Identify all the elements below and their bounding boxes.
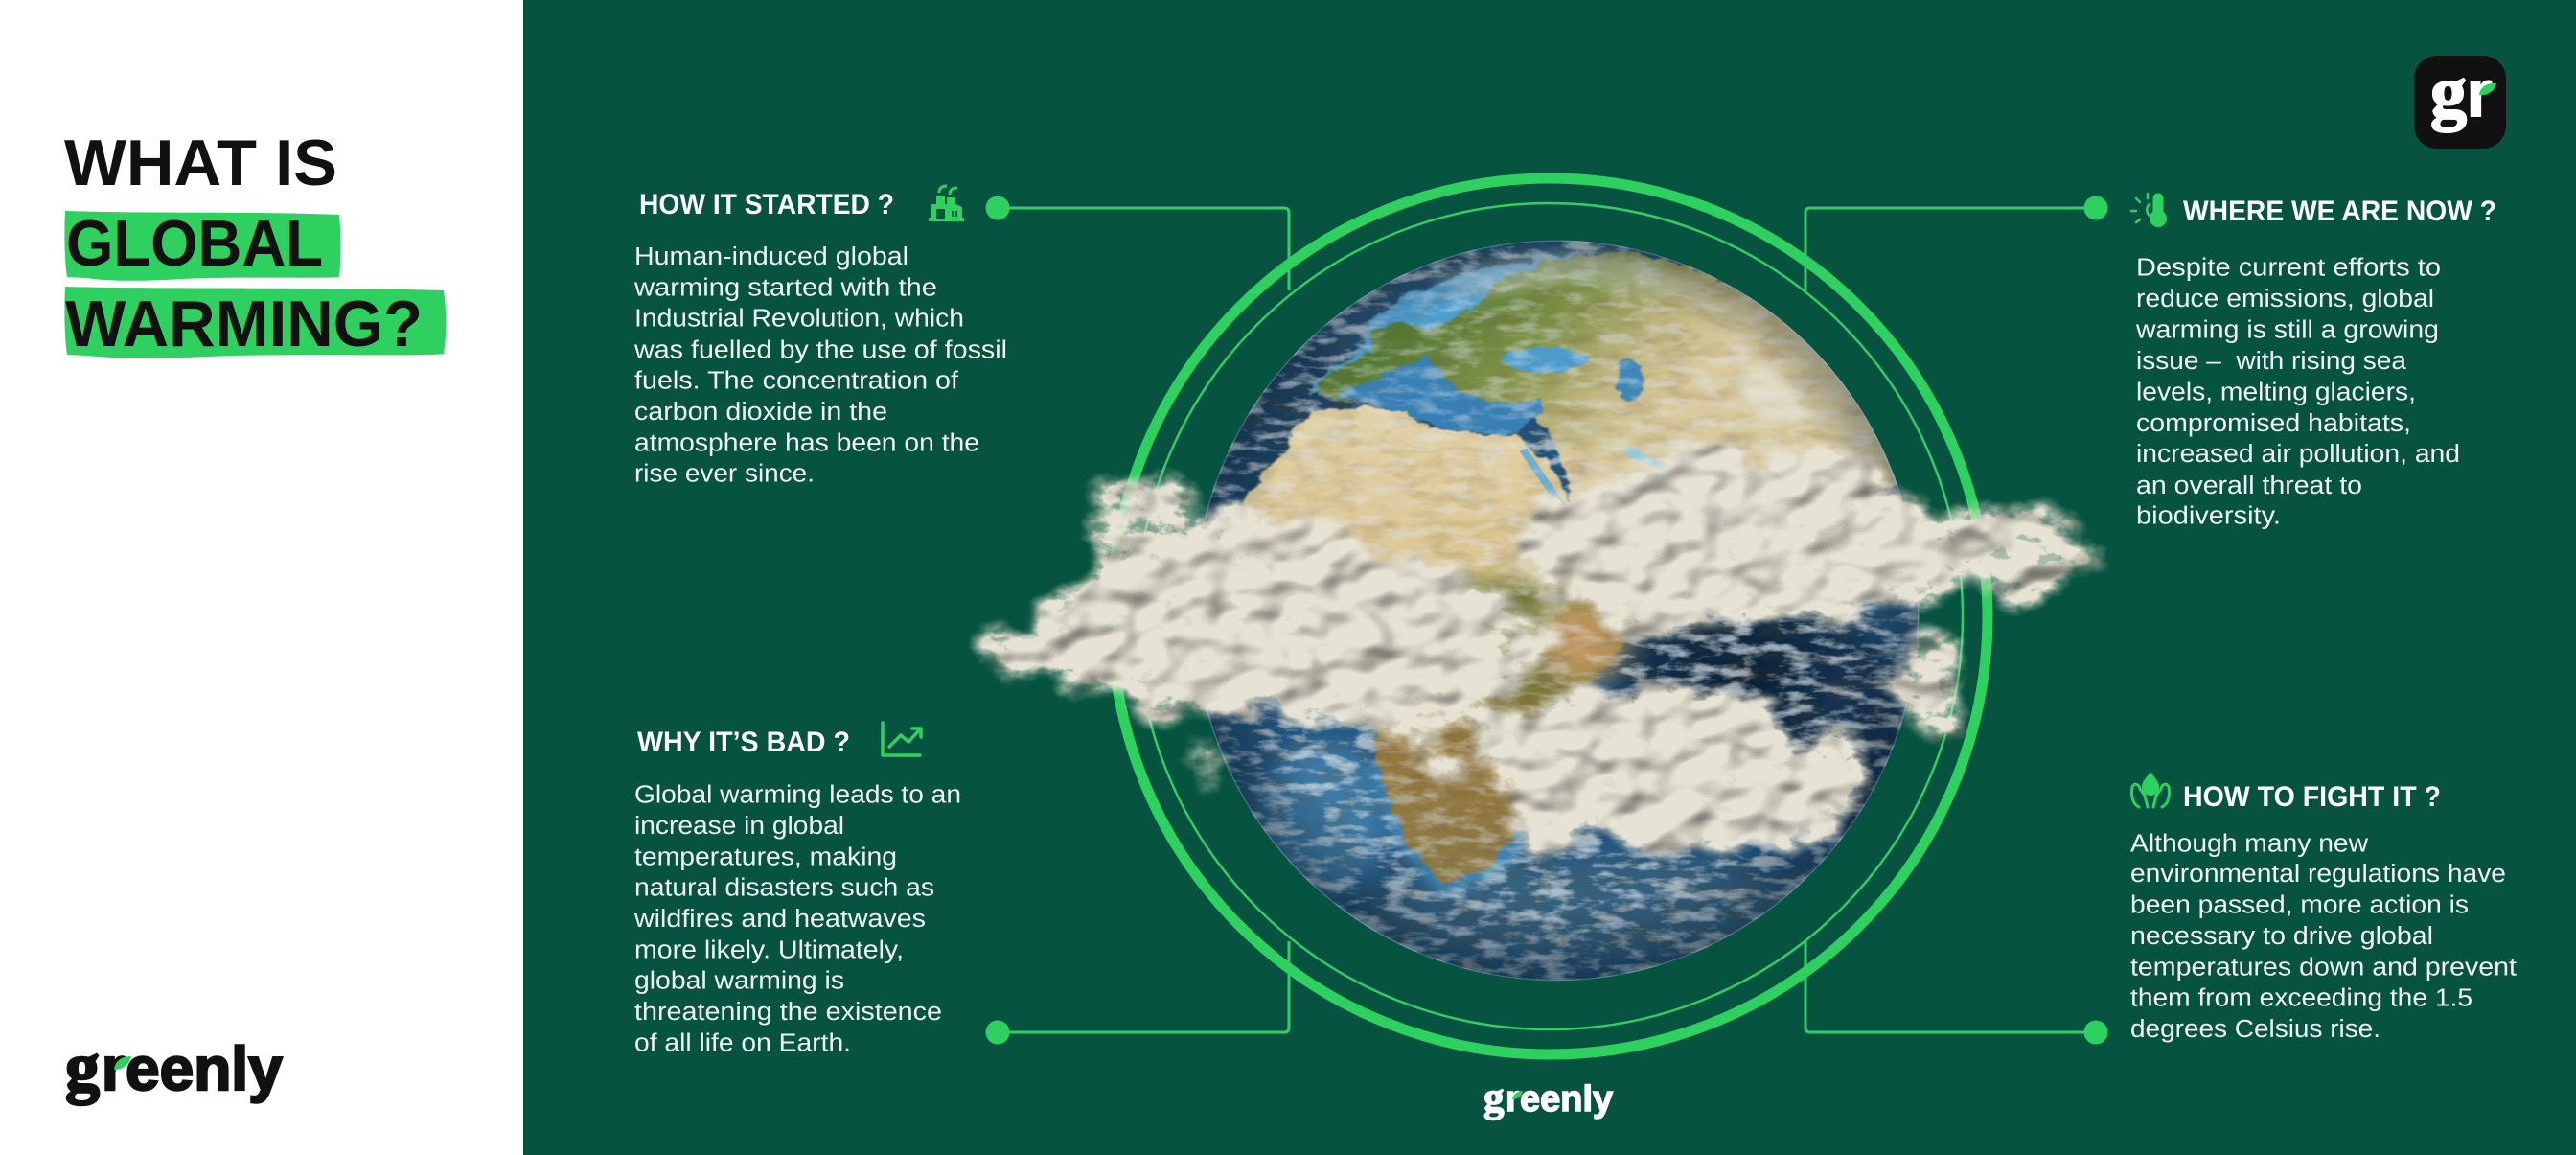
logo: greenly dark: g [65,1028,100,1105]
title line 1: WHAT IS [64,127,337,199]
icon: rising chart [883,723,921,755]
body text: fuels. The concentration of [634,367,959,394]
body text: global warming is [634,968,844,995]
logo: greenly white: r [1506,1079,1520,1120]
panel: how it started [633,186,1007,488]
body text: reduce emissions, global [2136,286,2434,312]
logo: greenly dark: r [102,1034,126,1103]
logo: greenly white [1484,1075,1613,1120]
body text: carbon dioxide in the [634,399,887,426]
panel: how to fight it [2130,772,2517,1043]
logo: greenly dark: eenly [126,1034,283,1103]
body text: degrees Celsius rise. [2130,1016,2380,1043]
body text: an overall threat to [2136,473,2362,499]
panel: where we are now [2131,194,2496,530]
body text: levels, melting glaciers, [2136,379,2416,405]
body text: Human-induced global [634,243,908,270]
connector lines [999,208,2096,1032]
heading: HOW TO FIGHT IT ? [2183,781,2441,813]
body text: rise ever since. [634,461,815,488]
title [64,127,446,360]
heading: WHY IT’S BAD ? [637,727,850,758]
body text: warming is still a growing [2135,316,2439,343]
body text: Although many new [2130,830,2369,857]
panel: why it's bad [633,723,961,1057]
body text: temperatures, making [634,843,897,870]
body text: them from exceeding the 1.5 [2130,984,2472,1011]
heading: WHERE WE ARE NOW ? [2183,196,2496,227]
title line 2: GLOBAL [66,207,323,280]
icon: factory [929,186,964,221]
body text: more likely. Ultimately, [634,936,904,963]
logo: app icon: g [2430,52,2467,132]
body text [633,243,1007,488]
heading: HOW IT STARTED ? [639,189,894,220]
body text: atmosphere has been on the [634,430,979,457]
body text: issue – with rising sea [2136,348,2407,375]
body text: increase in global [634,813,844,840]
white sidebar [0,0,523,1155]
body text: Industrial Revolution, which [634,306,964,333]
body text: temperatures down and prevent [2130,954,2517,981]
body text: been passed, more action is [2130,891,2469,918]
body text: environmental regulations have [2130,861,2506,888]
body text: compromised habitats, [2136,410,2411,437]
logo: app icon: r [2467,58,2492,130]
icon: hands and drop [2132,772,2169,807]
title line 3: WARMING? [65,288,423,360]
body text: increased air pollution, and [2136,441,2460,468]
icon: thermometer and sun [2131,194,2167,227]
highlight: global [64,211,341,281]
body text: natural disasters such as [634,874,934,901]
body text [633,782,961,1057]
body text: necessary to drive global [2130,923,2433,950]
logo: greenly white: eenly [1520,1079,1613,1120]
body text: Global warming leads to an [634,782,961,809]
body text [2130,830,2517,1043]
connector dots [985,196,2108,1045]
logo: greenly white: g [1484,1075,1505,1120]
body text: of all life on Earth. [634,1030,851,1057]
highlight: warming [64,287,446,358]
logo: app icon [2414,52,2506,149]
body text: was fuelled by the use of fossil [633,336,1007,363]
body text: warming started with the [633,274,937,301]
body text: Despite current efforts to [2136,254,2441,281]
globe [1179,230,1942,992]
body text: threatening the existence [634,999,942,1026]
logo: greenly dark [65,1028,283,1105]
body text [2135,254,2460,530]
clouds [978,450,2079,848]
outer and inner rings [1112,178,1988,1054]
body text: biodiversity. [2136,503,2281,530]
body text: wildfires and heatwaves [633,906,926,933]
